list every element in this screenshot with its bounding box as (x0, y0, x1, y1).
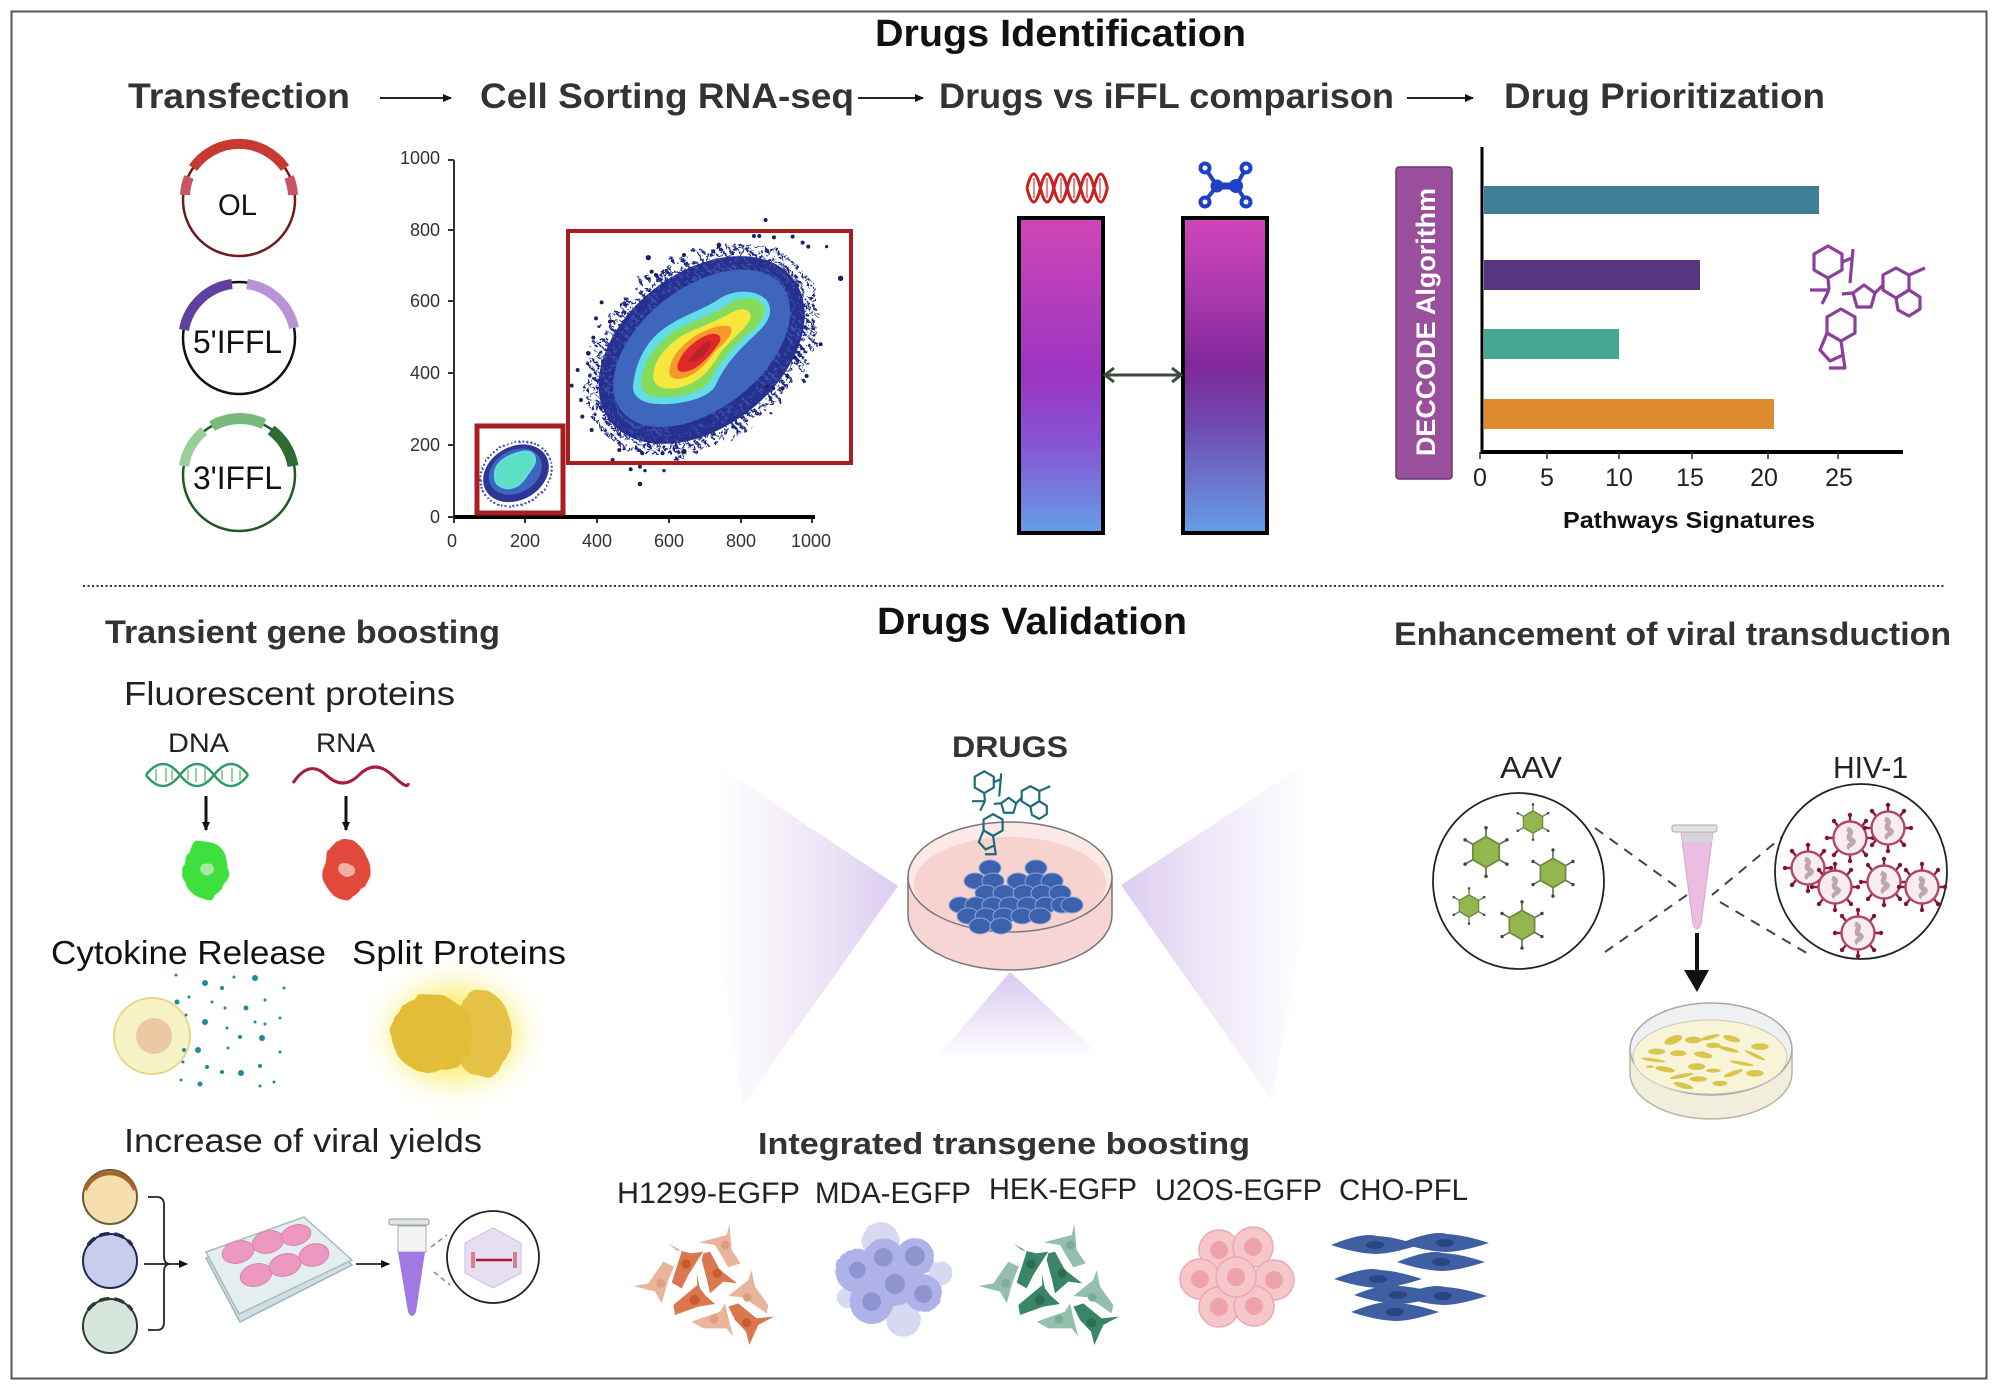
heading: Enhancement of viral transduction: Enhancement of viral transduction (1394, 616, 1951, 652)
step headings and arrows (128, 77, 1825, 116)
chart axis labels: 0 (430, 507, 440, 527)
callout lines (1595, 828, 1810, 955)
arrow: sorting to comparison (858, 97, 923, 99)
circle: HIV-1 particles (1775, 784, 1947, 959)
label: Fluorescent proteins: Fluorescent proteins (124, 675, 455, 712)
heading: Drugs vs iFFL comparison: Drugs vs iFFL comparison (939, 77, 1394, 116)
bracket and arrow: plasmids to plate (144, 1197, 187, 1330)
chart axis labels: 600 (654, 531, 684, 551)
label: Increase of viral yields: Increase of viral yields (124, 1122, 482, 1159)
icon: petri dish with cells (908, 822, 1112, 970)
plasmid: 3'IFFL (183, 419, 295, 531)
chart axis labels: 200 (410, 435, 440, 455)
panel: drugs vs iFFL comparison (1019, 164, 1267, 533)
icon: cytokine-releasing cell (114, 974, 286, 1088)
icon: red DNA (1027, 174, 1107, 202)
section title: Drugs Identification: Drugs Identification (875, 13, 1246, 55)
icon: pink tube (1672, 825, 1717, 929)
icon: H1299 cells (633, 1224, 774, 1345)
label: Cytokine Release: Cytokine Release (51, 934, 326, 971)
chart: flow cytometry scatter (400, 148, 854, 551)
divider (83, 585, 1944, 587)
label: RNA: RNA (316, 728, 375, 758)
chart axis labels (400, 148, 831, 551)
icon: yellow cell dish (1630, 1003, 1792, 1119)
label: HIV-1: HIV-1 (1833, 750, 1908, 785)
panel: enhancement of viral transduction (1394, 616, 1951, 1119)
bar chart: pathways signatures: 25 (1825, 464, 1853, 492)
arrow: transfection to sorting (380, 97, 451, 99)
bar chart: pathways signatures: 0 (1473, 464, 1487, 492)
plasmid: 3'IFFL: 3'IFFL (193, 460, 282, 496)
DECCODE label: DECCODE Algorithm (1411, 188, 1441, 456)
arrow: RNA to protein (344, 796, 348, 830)
icon: three packaging plasmids (83, 1170, 137, 1353)
chart axis labels: 800 (726, 531, 756, 551)
chart axis labels: 1000 (791, 531, 831, 551)
fan: towards bottom (935, 972, 1105, 1060)
icon: vector magnifier (431, 1211, 539, 1303)
heading: Integrated transgene boosting: Integrated transgene boosting (758, 1126, 1250, 1161)
icon: purple drug molecule (1810, 246, 1925, 368)
bar chart: pathways signatures: 20 (1750, 464, 1778, 492)
cell line labels: HEK-EGFP (989, 1173, 1137, 1206)
main population density (468, 205, 854, 519)
icon: blue molecule (1200, 164, 1250, 206)
label: DNA: DNA (168, 728, 229, 758)
bar chart: pathways signatures: 10 (1605, 464, 1633, 492)
plasmid: OL (183, 144, 295, 256)
chart axis labels: 600 (410, 291, 440, 311)
bar chart: pathways signatures: 15 (1676, 464, 1704, 492)
panel: plasmids (183, 144, 295, 531)
fan: towards right (1121, 745, 1335, 1100)
arrow: comparison to prioritization (1407, 97, 1473, 99)
cell line labels: U2OS-EGFP (1155, 1174, 1322, 1207)
arrow: plate to tube (356, 1263, 389, 1265)
chart axis labels: 1000 (400, 148, 440, 168)
icon: MDA cells (835, 1222, 953, 1337)
icon: purple tube (389, 1219, 429, 1316)
heading: Drugs Validation: Drugs Validation (877, 601, 1187, 643)
label: AAV: AAV (1500, 750, 1562, 785)
plasmid: 5'IFFL (183, 282, 295, 394)
panel: transient gene boosting (51, 614, 566, 1353)
small population density (468, 429, 564, 519)
fan: towards left (686, 745, 898, 1105)
cell line labels: MDA-EGFP (815, 1177, 971, 1210)
gate: small red box (477, 426, 563, 513)
bar chart: pathways signatures: 5 (1540, 464, 1554, 492)
chart axis labels: 0 (447, 531, 457, 551)
icon: green DNA helix (146, 764, 248, 786)
icon: green fluorescent protein (183, 841, 229, 899)
arrow: two-way comparison (1105, 368, 1181, 382)
arrow: tube to dish (1684, 933, 1709, 992)
cell line labels: CHO-PFL (1339, 1174, 1468, 1207)
bar chart: pathways signatures (1473, 147, 1903, 533)
plasmid: OL: OL (218, 189, 257, 222)
icon: CHO cells (1331, 1233, 1489, 1321)
panel: drugs validation (617, 601, 1489, 1345)
chart axis labels: 200 (510, 531, 540, 551)
icon: teal drug molecule (972, 771, 1050, 854)
heading: Transfection: Transfection (128, 77, 350, 116)
icon: red fluorescent protein (323, 840, 369, 900)
icon: split yellow proteins (391, 988, 517, 1080)
icon: HEK cells (978, 1224, 1119, 1345)
bar chart: pathways signatures: Pathways Signatures (1563, 507, 1815, 533)
heading: Drug Prioritization: Drug Prioritization (1504, 77, 1825, 116)
label: DRUGS: DRUGS (952, 731, 1068, 764)
gradient bar: DNA profile (1019, 218, 1103, 533)
gradient bar: molecule profile (1183, 218, 1267, 533)
chart axis labels: 400 (410, 363, 440, 383)
icon: U2OS cells (1180, 1227, 1294, 1327)
heading: Transient gene boosting: Transient gene boosting (105, 614, 500, 650)
chart axis labels: 800 (410, 220, 440, 240)
label: Split Proteins: Split Proteins (352, 934, 566, 971)
gate: large red box (568, 231, 851, 463)
icon: six-well plate (206, 1217, 352, 1322)
plasmid: 5'IFFL: 5'IFFL (193, 324, 282, 360)
icon: red RNA wave (293, 767, 408, 786)
circle: AAV particles (1433, 793, 1604, 969)
arrow: DNA to protein (204, 796, 208, 830)
chart axes (448, 160, 812, 523)
panel: drug prioritization (1396, 147, 1925, 533)
chart axis labels: 400 (582, 531, 612, 551)
cell line labels: H1299-EGFP (617, 1177, 800, 1210)
heading: Cell Sorting RNA-seq: Cell Sorting RNA-seq (480, 77, 854, 116)
cell line labels (617, 1173, 1468, 1210)
DECCODE label (1396, 167, 1452, 479)
